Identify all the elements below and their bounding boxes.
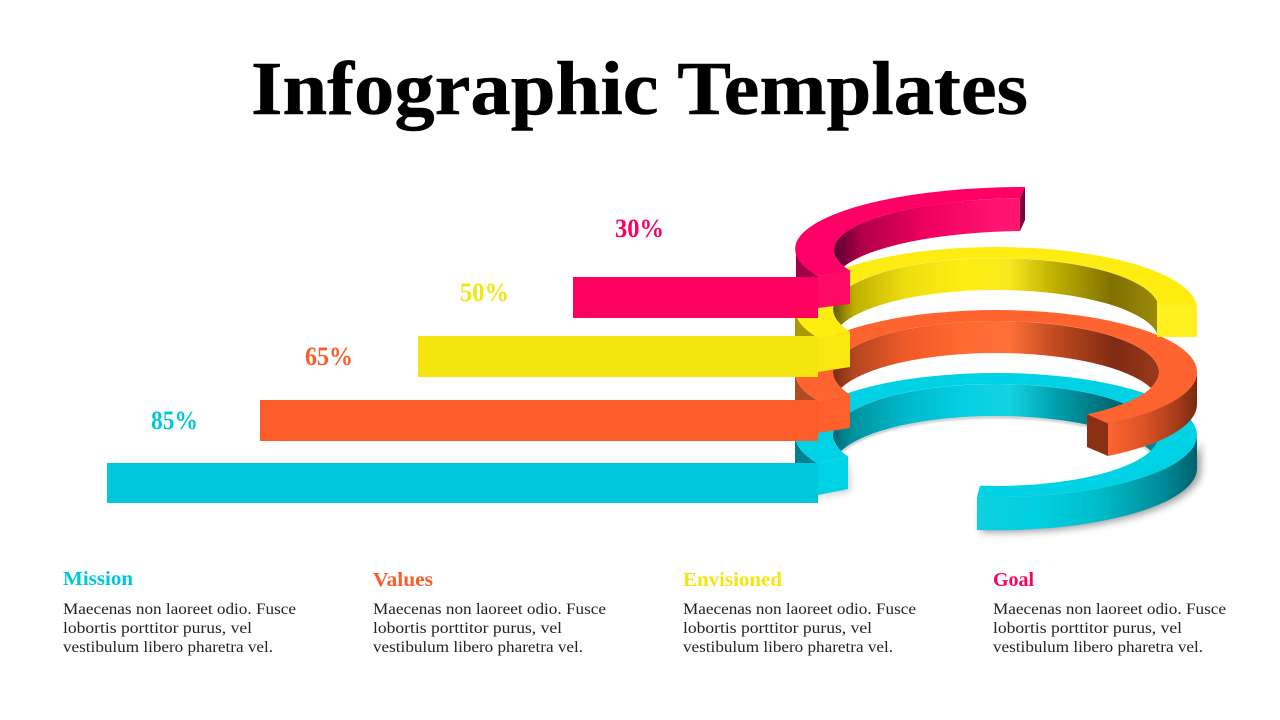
text block: Goal: lobortis porttitor purus, vel — [993, 620, 1183, 637]
text block: Goal: Goal — [993, 569, 1034, 591]
bar: orange 65% — [260, 310, 1197, 456]
text block: Mission: vestibulum libero pharetra vel. — [63, 639, 273, 656]
text block: Envisioned: lobortis porttitor purus, vel — [683, 620, 873, 637]
text block: Values: lobortis porttitor purus, vel — [373, 620, 563, 637]
chart: 3D ring bars — [107, 187, 1201, 532]
label: 30%: 30% — [615, 214, 664, 243]
text block: Values: vestibulum libero pharetra vel. — [373, 639, 583, 656]
text block: Envisioned: vestibulum libero pharetra vel. — [683, 639, 893, 656]
text block: Envisioned: Maecenas non laoreet odio. Fusce — [683, 601, 916, 618]
label: 50%: 50% — [460, 278, 509, 307]
shadow beneath cyan ring — [800, 437, 1201, 532]
text block: Envisioned — [683, 569, 916, 656]
text block: Goal: vestibulum libero pharetra vel. — [993, 639, 1203, 656]
text block: Mission: Maecenas non laoreet odio. Fusce — [63, 601, 296, 618]
text block: Mission: Mission — [63, 568, 133, 590]
text block: Mission: lobortis porttitor purus, vel — [63, 620, 253, 637]
text block: Values — [373, 569, 606, 656]
label: 85%: 85% — [151, 406, 198, 435]
text block: Envisioned: Envisioned — [683, 569, 782, 591]
bar: cyan 85% — [107, 373, 1197, 530]
text block: Values: Maecenas non laoreet odio. Fusce — [373, 601, 606, 618]
text block: Goal — [993, 569, 1226, 656]
text block: Goal: Maecenas non laoreet odio. Fusce — [993, 601, 1226, 618]
text block: Values: Values — [373, 569, 433, 591]
bar: yellow 50% — [418, 247, 1197, 377]
bar: pink 30% — [573, 187, 1025, 318]
text block: Mission — [63, 568, 296, 656]
title: Infographic Templates — [251, 47, 1028, 131]
label: 65%: 65% — [305, 342, 353, 371]
